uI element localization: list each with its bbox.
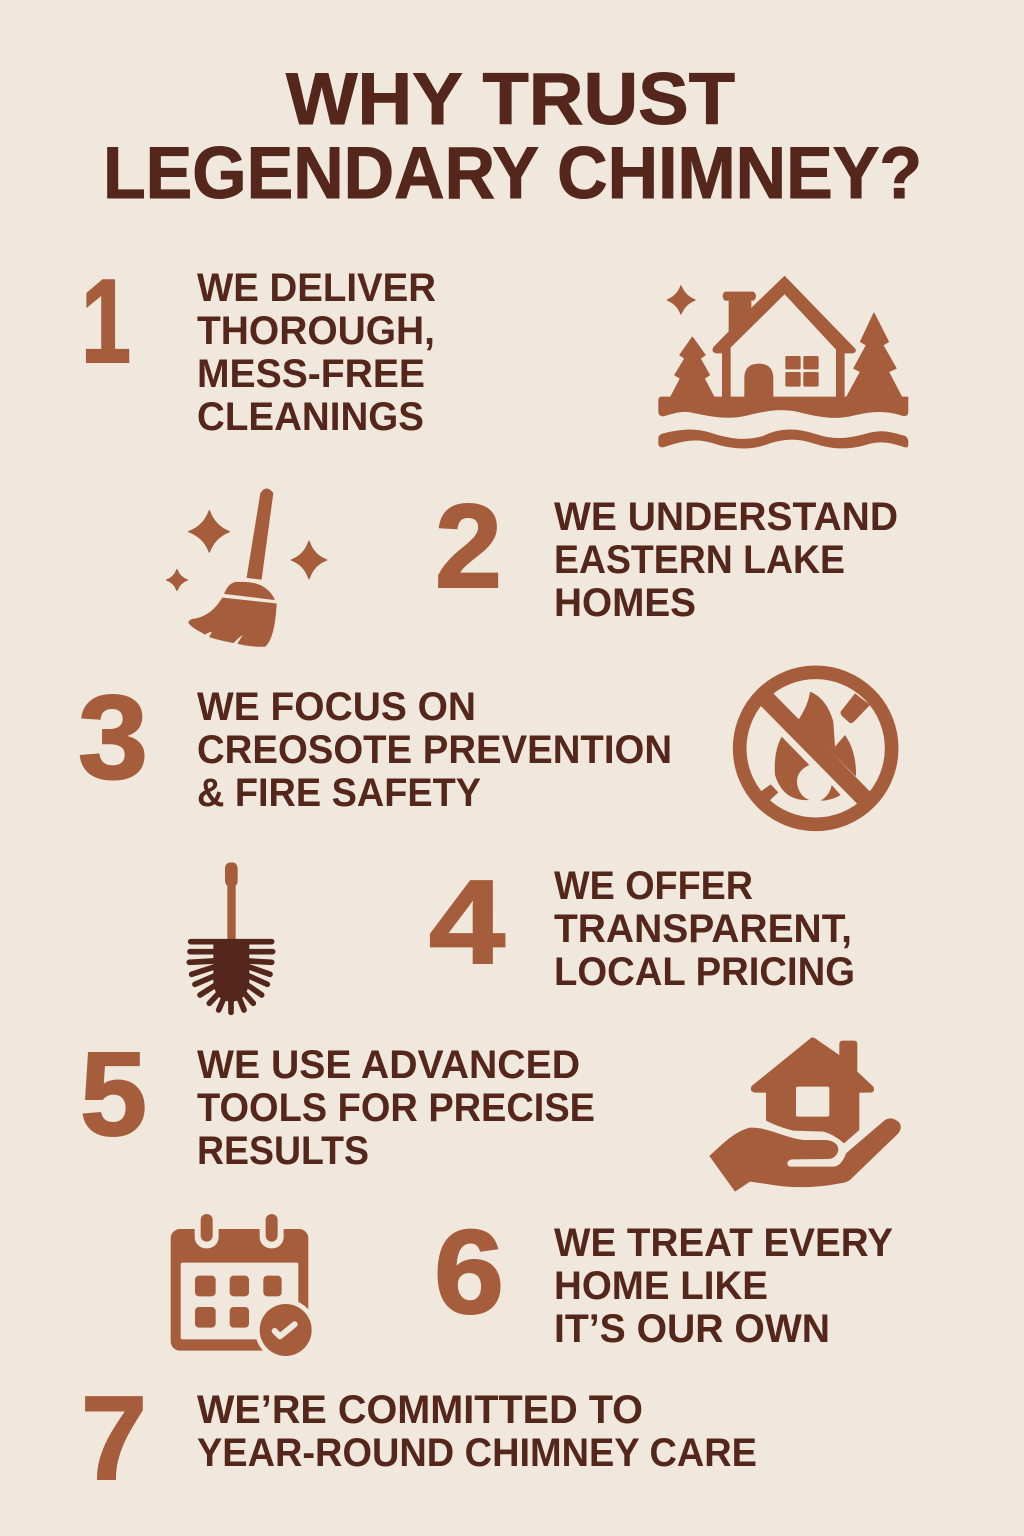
icon: lakeside house [659,277,908,448]
text: reason 4 [554,864,855,994]
text: reason 7: YEAR-ROUND CHIMNEY CARE [197,1431,757,1475]
icon: broom with sparkles [167,489,327,646]
binding rings [201,1214,213,1242]
text: reason 1: WE DELIVER [197,266,436,310]
text: reason 6: IT’S OUR OWN [554,1307,830,1351]
icon: chimney brush [189,862,273,1012]
text: reason 1: CLEANINGS [197,395,424,439]
reason 5 [80,1028,595,1173]
check badge [255,1299,316,1361]
reason 2 [435,480,898,625]
text: reason 3 [197,685,672,815]
reason 3 [78,671,672,815]
reason 6 [434,1206,893,1351]
text: reason 7 [197,1388,757,1475]
text: reason 3: CREOSOTE PREVENTION [197,728,672,772]
number 2: 2 [435,480,502,613]
text: reason 4: WE OFFER [554,864,753,908]
brush bristles [189,939,273,1012]
number 3: 3 [78,671,148,804]
text: reason 4: TRANSPARENT, [554,907,852,951]
number 5: 5 [80,1028,147,1161]
text: reason 1: THOROUGH, [197,309,435,353]
number 1: 1 [81,255,131,388]
title [103,59,922,214]
date squares [195,1276,282,1328]
calendar body [171,1229,308,1351]
reason 7 [81,1372,757,1505]
text: reason 5: RESULTS [197,1129,369,1173]
text: reason 2 [554,495,898,625]
icon: calendar with check [171,1212,316,1361]
binding cutouts [195,1212,219,1248]
reason 1 [81,255,436,439]
text: reason 1 [197,266,436,439]
text: reason 5: TOOLS FOR PRECISE [197,1086,595,1130]
text: reason 3: & FIRE SAFETY [197,771,481,815]
text: reason 7: WE’RE COMMITTED TO [197,1388,643,1432]
brush handle [225,862,238,940]
text: reason 5 [197,1043,595,1173]
icon: no fire [740,672,892,824]
title: WHY TRUST [286,59,735,140]
text: reason 3: WE FOCUS ON [197,685,476,729]
text: reason 2: EASTERN LAKE [554,538,845,582]
title: LEGENDARY CHIMNEY? [103,133,922,214]
calendar grid area [181,1263,298,1339]
number 4: 4 [429,856,505,989]
reason 4 [429,856,855,994]
text: reason 2: WE UNDERSTAND [554,495,898,539]
text: reason 4: LOCAL PRICING [554,950,855,994]
text: reason 6 [554,1221,893,1351]
number 7: 7 [81,1372,147,1505]
text: reason 1: MESS-FREE [197,352,425,396]
text: reason 6: HOME LIKE [554,1264,768,1308]
text: reason 2: HOMES [554,581,696,625]
text: reason 5: WE USE ADVANCED [197,1043,580,1087]
icon: house in hand [709,1037,901,1192]
number 6: 6 [434,1206,504,1339]
text: reason 6: WE TREAT EVERY [554,1221,893,1265]
